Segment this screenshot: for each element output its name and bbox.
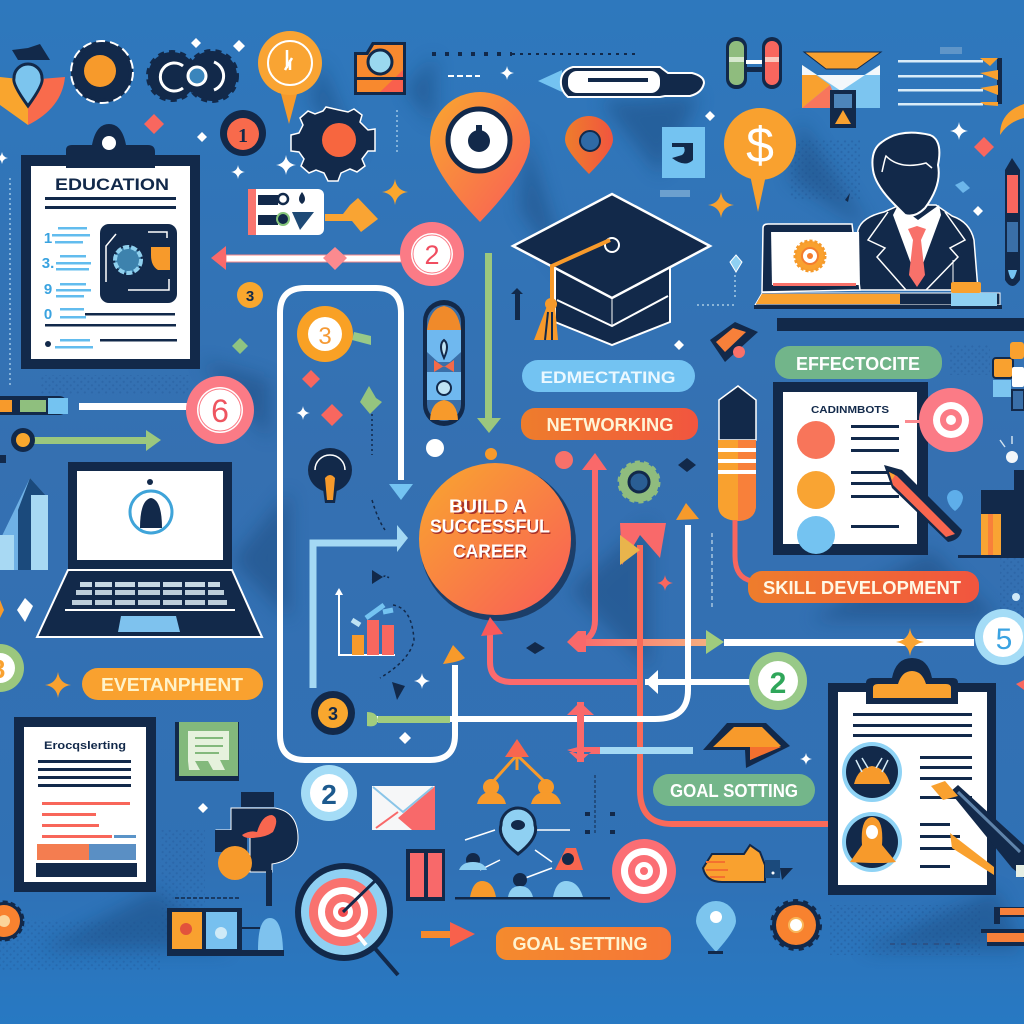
- icon: dollar pin: $: [746, 117, 774, 173]
- pill: goal setting green: GOAL SOTTING: [670, 781, 798, 801]
- icon: large pen bottom right: [931, 781, 1024, 878]
- connector: orange long route: [620, 523, 830, 824]
- heading: hero title: SUCCESSFUL: [431, 518, 551, 538]
- heading: hero title: [430, 496, 551, 563]
- pill: goal setting orange: [496, 927, 671, 960]
- icon: dollar pin: [724, 108, 796, 212]
- icon: gear coral centre: [291, 107, 375, 181]
- icon: small orange house: [710, 322, 758, 362]
- arrow: green down: [477, 253, 501, 433]
- icon: green note square: [175, 722, 239, 781]
- pill: goal setting orange: GOAL SETTING: [512, 934, 648, 954]
- sparkles top left: [0, 38, 408, 205]
- number badge 3 black: 3: [328, 704, 338, 724]
- icon: interlocked gears: [148, 51, 237, 101]
- number badge 3 small: 3: [246, 288, 254, 305]
- icon: target with stem: [905, 388, 983, 452]
- illustration: laptop: [37, 462, 262, 637]
- panel: education clipboard: [21, 124, 200, 369]
- arrow: dark small up: [511, 288, 523, 320]
- illustration: professional at laptop: [754, 133, 1024, 331]
- pill: event label: [82, 668, 263, 700]
- sparkle near folded arrow: [800, 753, 812, 765]
- icon: leaf top right: [1000, 104, 1024, 135]
- icon: small pin top: [565, 116, 613, 174]
- arrow: green with dot: [11, 428, 161, 452]
- icon: list lines with arrows: [898, 47, 1002, 106]
- icon: clipboard clip: [866, 658, 958, 704]
- arrow: pink to badge 2: [211, 246, 406, 270]
- heading: document: Erocqslerting: [44, 740, 126, 752]
- number badge 3 orange: [297, 306, 371, 362]
- connector: white to number 2: [512, 670, 750, 694]
- icon: target coral: [612, 839, 676, 903]
- icon: light blue pin: [696, 901, 736, 954]
- coral dot and arrow under pills: [555, 451, 573, 469]
- pill: goal setting green: [653, 774, 815, 806]
- sparkles top right: [674, 111, 994, 350]
- number badge 3 small: [237, 282, 263, 308]
- heading: hero title: BUILD A: [449, 496, 527, 516]
- connector: coral U into hero: [481, 617, 640, 682]
- pill: light blue label: [522, 360, 695, 392]
- pill: networking: [521, 408, 698, 440]
- panel: education clipboard: 9: [44, 281, 52, 298]
- panel: education clipboard: 0: [44, 306, 52, 323]
- number badge left edge: [0, 644, 24, 692]
- pill: light blue label: EDMECTATING: [540, 368, 676, 387]
- icon: pointing hand: [703, 845, 793, 882]
- decoration near route: [526, 533, 712, 654]
- number badge 6: 6: [211, 393, 229, 429]
- icon: pen right edge: [1005, 158, 1020, 286]
- icon: orange speech pin: [258, 31, 322, 124]
- panel: document bottom left: [14, 717, 156, 892]
- number badge 3 orange: 3: [318, 323, 332, 350]
- icon: stacked books: [890, 907, 1024, 946]
- icon: target with magnifier: [295, 863, 398, 975]
- icon: orange sun gear: [772, 901, 820, 949]
- heading: education: EDUCATION: [55, 175, 169, 194]
- heading: hero title: SUCCESSFUL: [430, 516, 550, 536]
- dotted decorative line: [10, 54, 640, 385]
- pill: skill development: SKILL DEVELOPMENT: [763, 578, 961, 598]
- icon: person silhouette: [850, 133, 978, 290]
- pill chip left edge: [0, 396, 68, 415]
- number badge 3 black: [311, 691, 355, 735]
- icon: avatar bottom: [842, 812, 902, 872]
- number badge 1: 1: [238, 125, 248, 147]
- hero: build a successful career circle: [419, 463, 576, 621]
- icon: orange burst left edge: [0, 902, 23, 940]
- icon: orange photo box: [354, 42, 406, 95]
- pill: networking: NETWORKING: [546, 415, 674, 435]
- panel: clipboard right: [828, 658, 996, 895]
- number badge 5: [975, 593, 1024, 665]
- dotted tiny connector under cap: [697, 255, 742, 305]
- connector: white rounded route: [280, 288, 465, 760]
- number badge 2 pink: 2: [424, 240, 440, 270]
- sparkles left: [0, 598, 208, 813]
- icon: shield with pin: [0, 44, 65, 125]
- arrow: white to badge 6: [79, 403, 197, 410]
- icon: puzzle figure: [215, 792, 298, 906]
- icon: dark gear card: [100, 224, 177, 303]
- desk: [754, 260, 1002, 309]
- arrow: orange card arrow: [325, 198, 378, 232]
- connector: coral up arrow: [567, 453, 707, 652]
- connector: green and white route: [367, 503, 699, 726]
- illustration: right towers: [947, 436, 1024, 558]
- icon: envelope: [372, 786, 435, 830]
- heading: candidates: CADINMBOTS: [811, 405, 889, 416]
- panel: education clipboard: 1: [44, 230, 52, 247]
- icon: green gear: [619, 458, 696, 502]
- arrow: green marker to badge 5 line: [706, 628, 1024, 690]
- diagram: network tree: [455, 739, 615, 900]
- heading: hero title: CAREER: [454, 543, 528, 563]
- bar chart: [335, 570, 430, 744]
- dashed connector: [372, 500, 385, 530]
- number badge 2 blue: [301, 765, 357, 821]
- icon: envelope with tag: [802, 52, 881, 128]
- pill: skill development: [748, 571, 979, 603]
- heading: hero title: BUILD A: [453, 498, 525, 518]
- icon: pencil: [884, 465, 962, 542]
- icon: coral pause bars: [406, 849, 445, 901]
- small label flowchart card: [248, 189, 324, 235]
- number badge 5: 5: [996, 623, 1012, 656]
- icon: avatar on screen: [130, 491, 172, 533]
- pill: green label: [775, 346, 942, 379]
- connector: light blue elbow arrow: [313, 525, 408, 688]
- illustration: city buildings left: [0, 478, 48, 570]
- arrow: orange folded: [703, 723, 790, 768]
- icon: orange and blue boxes: [167, 898, 284, 956]
- number badge 2 green: [749, 652, 807, 710]
- icon: coloured tiles right: [993, 342, 1024, 410]
- icon: avatar top: [842, 742, 902, 802]
- panel: education clipboard: 3.: [42, 255, 54, 272]
- number badge 2 pink: [400, 222, 464, 286]
- number badge 1: [220, 110, 266, 156]
- icon: portrait capsule: [423, 300, 465, 426]
- icon: graduation cap: [513, 194, 710, 345]
- pill: event label: EVETANPHENT: [101, 675, 243, 695]
- icon: bulb: [308, 448, 352, 503]
- number badge 2 blue: 2: [321, 779, 337, 810]
- heading: hero title: CAREER: [453, 542, 527, 562]
- panel: candidates document: [773, 382, 928, 555]
- pill: green label: EFFECTOCITE: [796, 354, 920, 374]
- sparkles inside route: [0, 338, 497, 463]
- icon: gear orange centre: [71, 41, 133, 103]
- number badge 2 green: 2: [770, 667, 786, 700]
- icon: large location pin: [430, 92, 530, 222]
- connector: up-down coral with blue line: [567, 702, 693, 762]
- icon: blue square: [660, 127, 705, 197]
- arrow: orange to goal setting: [421, 922, 475, 947]
- icon: marker pencil: [718, 386, 756, 581]
- icon: pen top: [538, 67, 704, 97]
- number badge 6: [186, 376, 254, 444]
- icon: capsule H: [726, 37, 782, 89]
